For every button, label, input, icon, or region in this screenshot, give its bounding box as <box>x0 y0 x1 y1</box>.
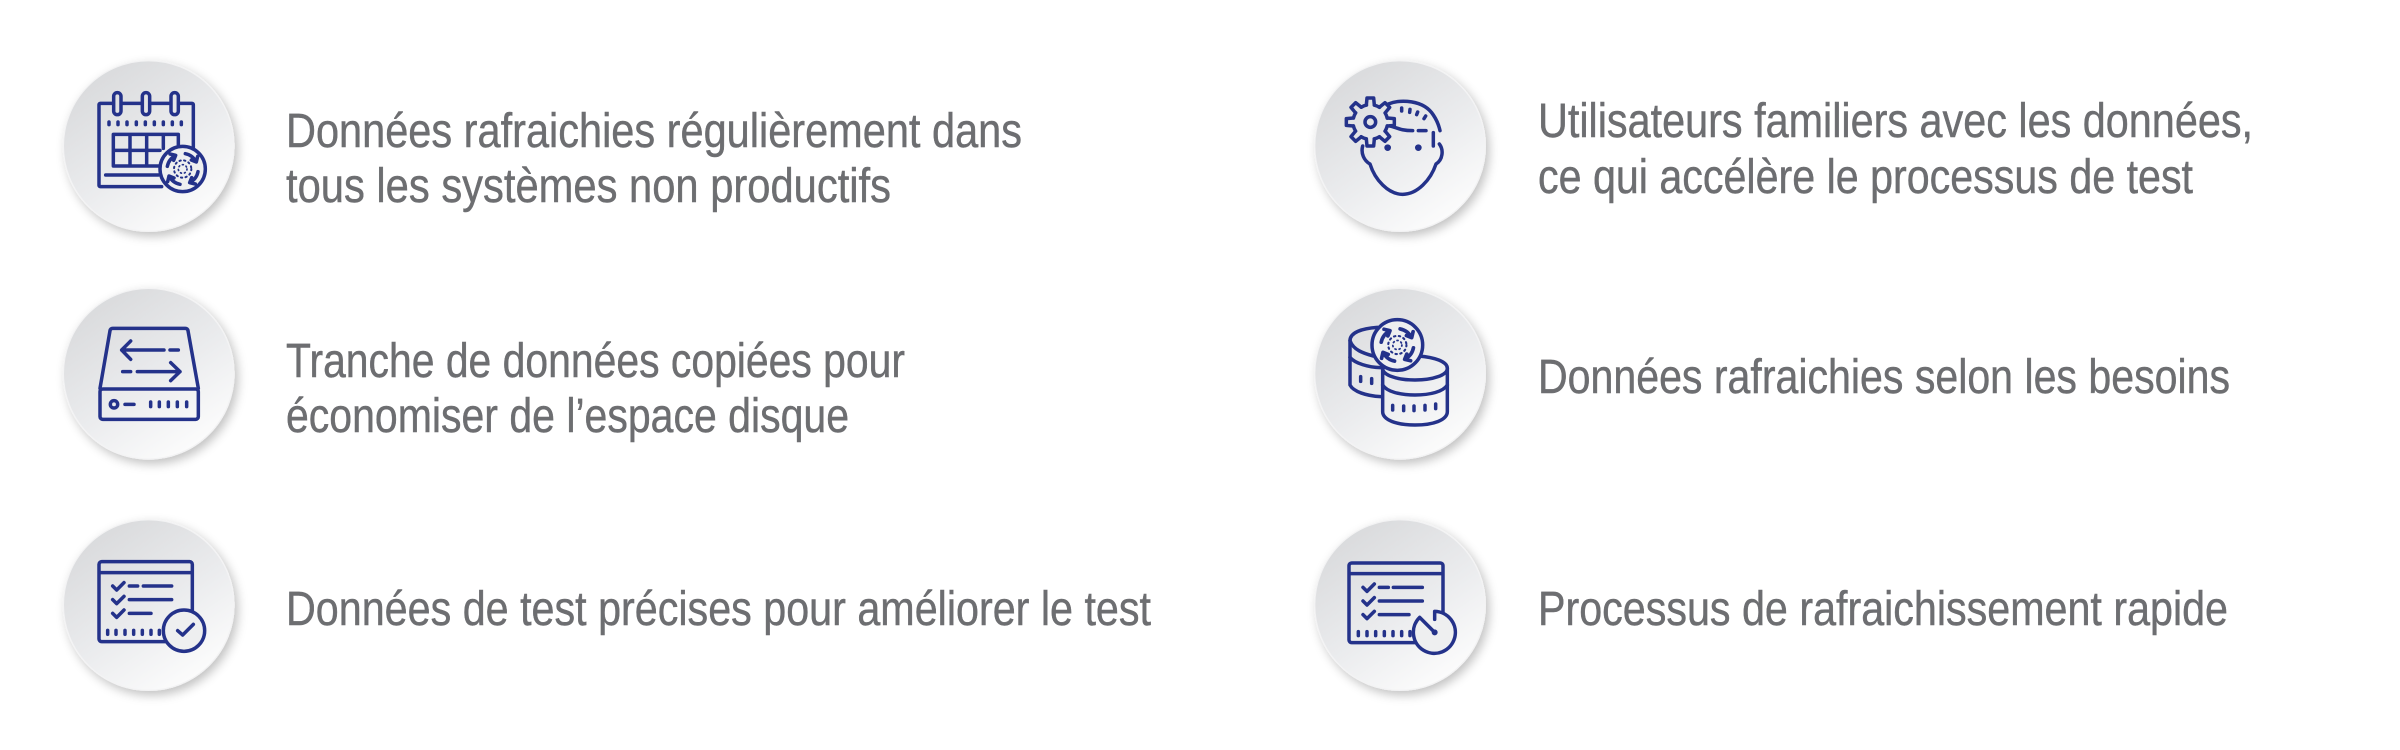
panel: refreshed on demand <box>1315 288 2230 459</box>
text: regularly refreshed data: tous les systèmes non productifs <box>286 160 891 213</box>
text: regularly refreshed data: Données rafraichies régulièrement dans <box>286 105 1022 158</box>
text: familiar users: ce qui accélère le processus de test <box>1538 151 2193 204</box>
text: data slice: Tranche de données copiées pour <box>286 335 905 388</box>
text: familiar users <box>1538 95 2253 204</box>
text: data slice <box>286 335 905 443</box>
icon: databases with refresh badge <box>1315 288 1485 459</box>
panel: familiar users <box>1315 61 2253 231</box>
panel: data slice <box>63 288 905 459</box>
text: accurate test data: Données de test précises pour améliorer le test <box>286 583 1151 636</box>
panel: accurate test data <box>63 520 1151 690</box>
icon: checklist window with check badge <box>63 520 234 690</box>
text: data slice: économiser de l’espace disque <box>286 390 849 443</box>
panel: regularly refreshed data <box>63 61 1022 231</box>
text: fast refresh process: Processus de rafraichissement rapide <box>1538 583 2228 636</box>
text: familiar users: Utilisateurs familiers avec les données, <box>1538 95 2253 148</box>
panel: fast refresh process <box>1315 520 2228 690</box>
text: regularly refreshed data <box>286 105 1022 213</box>
icon: head with gear <box>1315 61 1485 231</box>
icon: calendar with refresh badge <box>63 61 234 231</box>
icon: checklist window with gauge <box>1315 520 1485 690</box>
icon: disk drive with arrows <box>63 288 234 459</box>
text: refreshed on demand: Données rafraichies selon les besoins <box>1538 351 2230 404</box>
